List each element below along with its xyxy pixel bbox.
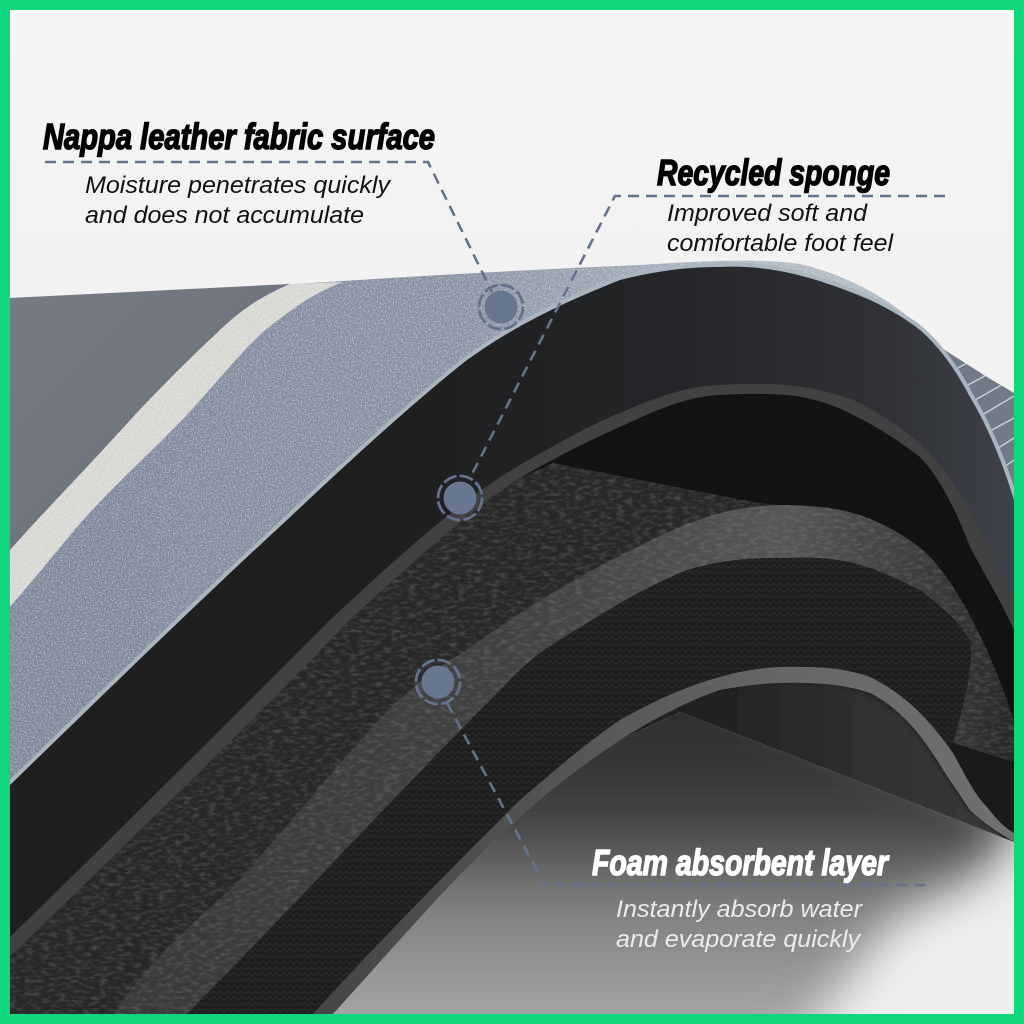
layer: black gap under sponge (10, 394, 1014, 1014)
layer: mesh edge strip (313, 667, 1014, 1014)
description: and evaporate quickly (616, 926, 862, 953)
layer: foam lighter band (113, 505, 1014, 1014)
callout: nappa leather (43, 116, 523, 329)
description (616, 896, 863, 953)
black corner under foam (950, 742, 1014, 845)
heading: Foam absorbent layer (592, 842, 890, 883)
layer: dark underside of leather (10, 267, 1014, 1014)
layer: recycled sponge edge (10, 384, 1014, 1014)
surface rim (10, 267, 1014, 785)
mat back corner with grid lines (944, 350, 1014, 486)
marker (438, 476, 482, 520)
layer: mesh base (187, 558, 971, 1014)
surface left dark section (10, 284, 290, 550)
description: comfortable foot feel (667, 230, 894, 257)
floor and cast shadow (333, 712, 1014, 1014)
description (667, 200, 894, 257)
surface top face (10, 261, 1014, 1014)
marker (479, 285, 523, 329)
heading: Recycled sponge (657, 152, 890, 193)
white reflective stripe (10, 282, 343, 607)
marker (416, 660, 460, 704)
description: and does not accumulate (85, 202, 364, 229)
callout: recycled sponge (438, 152, 945, 520)
description: Improved soft and (667, 200, 868, 227)
mesh underside (680, 683, 1020, 846)
description: Instantly absorb water (616, 896, 863, 923)
callout: foam absorbent layer (416, 660, 928, 953)
leader line (470, 196, 945, 478)
leader line (447, 703, 928, 885)
layer: nappa leather surface (10, 261, 1014, 1014)
description: Moisture penetrates quickly (85, 172, 392, 199)
leader line (45, 162, 492, 292)
heading: Nappa leather fabric surface (43, 116, 435, 157)
layer: foam dark face (10, 463, 1014, 1014)
description (85, 172, 392, 229)
